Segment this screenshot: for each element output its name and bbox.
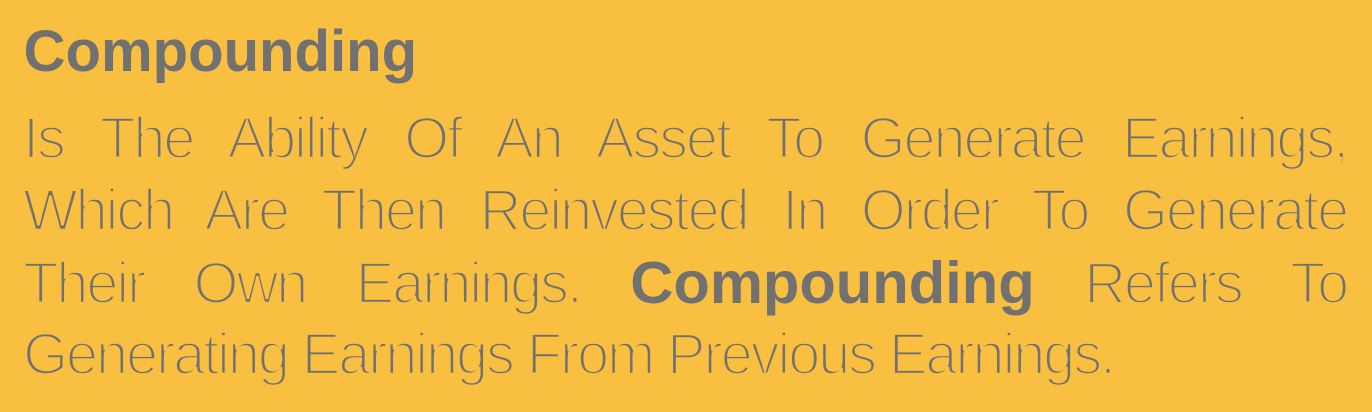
line 3: Their Own Earnings. Compounding Refers To [23, 249, 1347, 316]
line 4: Generating Earnings From Previous Earnings. [23, 322, 1114, 387]
line 2: Which Are Then Reinvested In Order To Generate [23, 178, 1347, 243]
heading: Compounding [24, 19, 417, 84]
body text [23, 106, 1347, 387]
line 1: Is The Ability Of An Asset To Generate Earnings, [23, 106, 1347, 171]
